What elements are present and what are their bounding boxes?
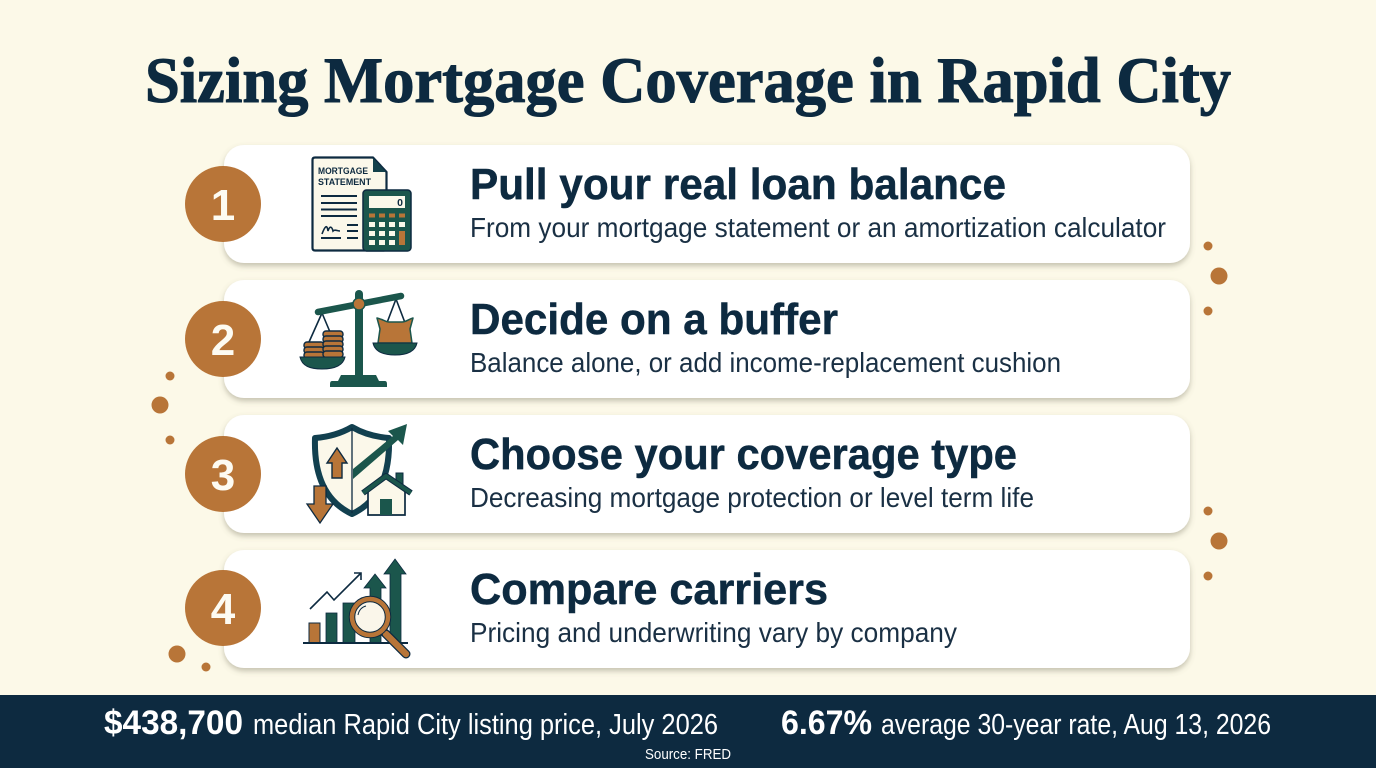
step 1 heading: Pull your real loan balance <box>470 160 1006 209</box>
step 2 number badge: 2 <box>211 316 235 365</box>
stat: listing price label: median Rapid City listing price, July 2026 <box>253 709 718 741</box>
step 3 number badge <box>185 436 261 512</box>
panel: step 2 <box>185 280 1190 398</box>
panel: step 3 <box>185 415 1190 533</box>
icon: mortgage statement and calculator: MORTGAGE <box>318 166 368 176</box>
footer band <box>0 695 1376 768</box>
step 4 heading: Compare carriers <box>470 565 828 614</box>
step 4 number badge <box>185 570 261 646</box>
step 1 description: From your mortgage statement or an amortization calculator <box>470 212 1166 243</box>
step 1 number badge <box>185 166 261 242</box>
icon: mortgage statement and calculator <box>312 158 411 251</box>
stat: mortgage rate label: average 30-year rate, Aug 13, 2026 <box>881 709 1271 741</box>
panel: step 1 <box>185 145 1190 263</box>
step 2 number badge <box>185 301 261 377</box>
panel: step 4 <box>185 550 1190 668</box>
icon: mortgage statement and calculator: 0 <box>397 197 403 209</box>
decorative dots <box>152 242 1228 672</box>
icon: bar chart with magnifying glass <box>303 559 408 654</box>
step 3 heading: Choose your coverage type <box>470 430 1017 479</box>
step 2 description: Balance alone, or add income-replacement cushion <box>470 347 1061 378</box>
icon: mortgage statement and calculator: STATEMENT <box>318 177 372 187</box>
step 1 number badge: 1 <box>211 181 235 230</box>
stat: mortgage rate value: 6.67% <box>781 704 872 742</box>
step 4 description: Pricing and underwriting vary by company <box>470 617 957 648</box>
step 3 description: Decreasing mortgage protection or level term life <box>470 482 1034 513</box>
source note: Source: FRED <box>645 746 731 763</box>
step 3 number badge: 3 <box>211 451 235 500</box>
title: Sizing Mortgage Coverage in Rapid City <box>145 45 1231 117</box>
step 4 number badge: 4 <box>211 585 236 634</box>
stat: listing price value: $438,700 <box>104 704 243 742</box>
step 2 heading: Decide on a buffer <box>470 295 838 344</box>
icon: shield, arrows and house <box>307 424 411 523</box>
icon: balance scale with coins and bag <box>300 290 417 387</box>
